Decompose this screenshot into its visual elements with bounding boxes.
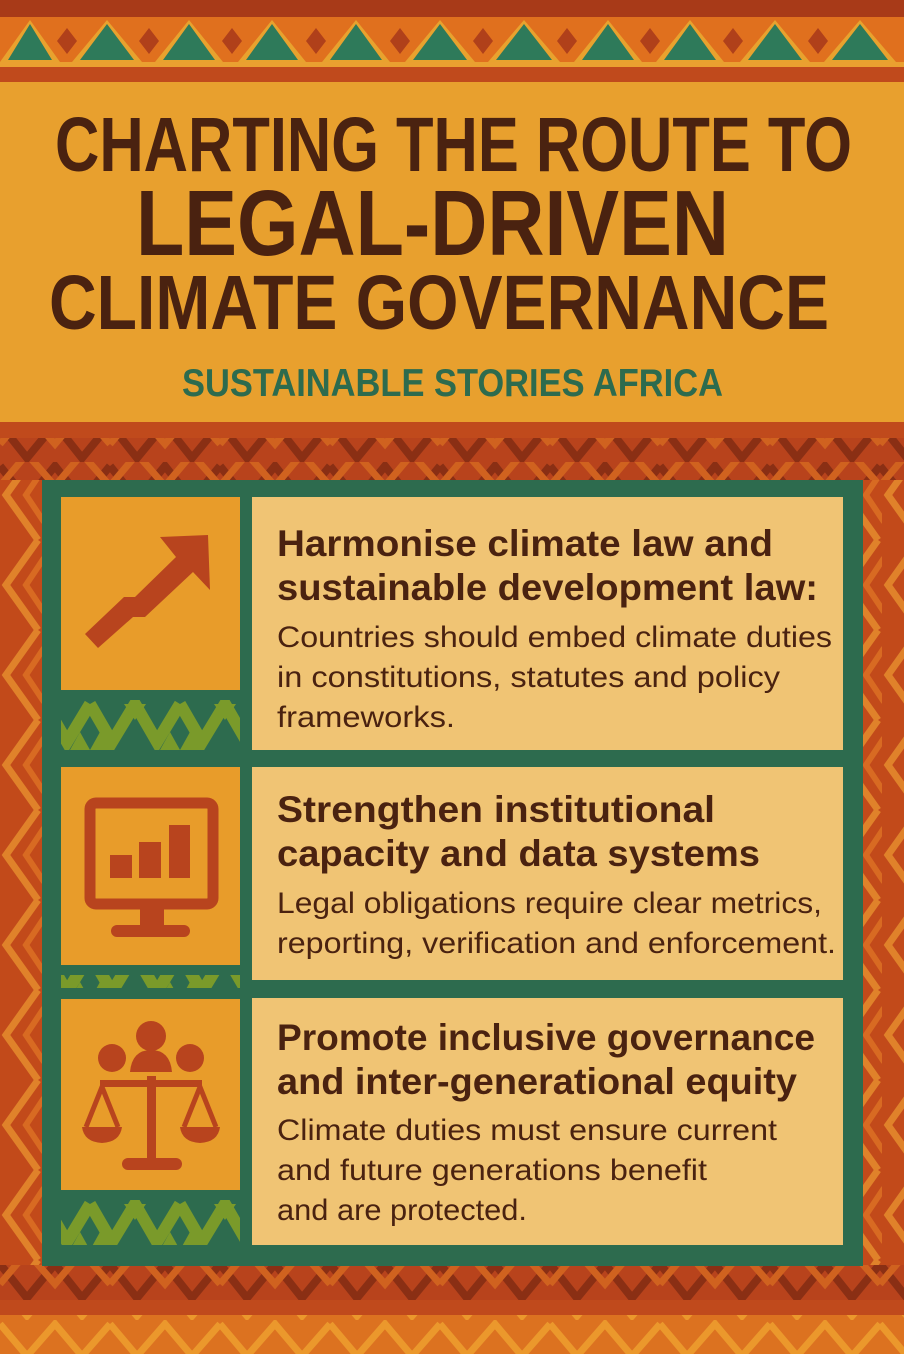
text block: inclusive: Climate duties must ensure current xyxy=(277,1114,778,1147)
title: LEGAL-DRIVEN xyxy=(136,171,729,275)
text block: institutional: capacity and data systems xyxy=(277,833,760,874)
text block: inclusive: and inter-generational equity xyxy=(277,1061,797,1102)
text block: institutional: reporting, verification and enforcement. xyxy=(277,927,836,960)
main green frame xyxy=(42,480,863,1266)
text block: institutional: Legal obligations require clear metrics, xyxy=(277,887,822,920)
text block: inclusive: and are protected. xyxy=(277,1194,527,1227)
subtitle: SUSTAINABLE STORIES AFRICA xyxy=(182,362,723,405)
panel: harmonise xyxy=(61,497,843,750)
text block: inclusive xyxy=(252,998,843,1245)
text block: harmonise: frameworks. xyxy=(277,701,455,734)
text block: harmonise: Harmonise climate law and xyxy=(277,523,773,564)
text block: inclusive: Promote inclusive governance xyxy=(277,1017,815,1058)
text block: institutional: Strengthen institutional xyxy=(277,789,715,830)
icon: people and scales xyxy=(61,999,240,1190)
title xyxy=(49,102,852,346)
icon: rising arrow xyxy=(61,497,240,690)
text block: harmonise: sustainable development law: xyxy=(277,567,818,608)
middle border bands xyxy=(0,422,904,1354)
icon: monitor chart xyxy=(61,767,240,965)
top border band xyxy=(0,0,904,82)
text block: institutional xyxy=(252,767,843,980)
header panel xyxy=(0,82,904,422)
text block: harmonise: in constitutions, statutes and policy xyxy=(277,661,780,694)
text block: inclusive: and future generations benefit xyxy=(277,1154,708,1187)
text block: harmonise xyxy=(252,497,843,750)
text block: harmonise: Countries should embed climate duties xyxy=(277,621,832,654)
panel: inclusive governance xyxy=(61,998,843,1245)
panel: institutional capacity xyxy=(61,767,843,988)
